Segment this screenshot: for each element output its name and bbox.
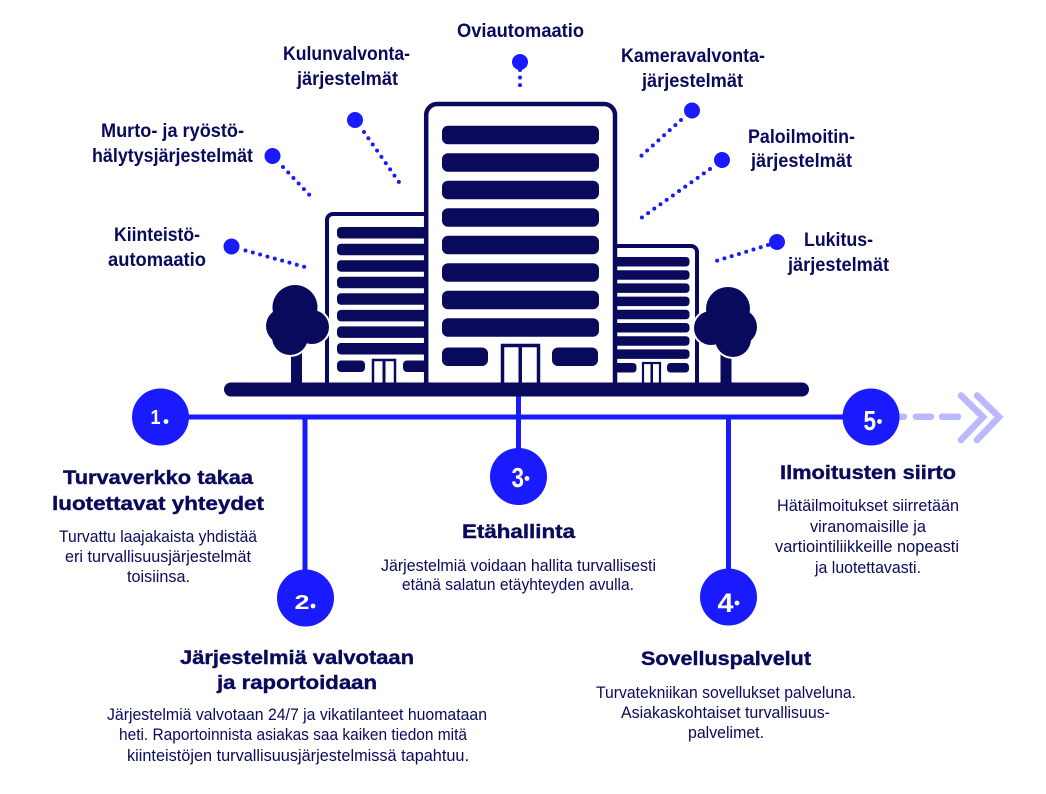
text: step 1: [59, 528, 258, 586]
label: Lukitusjärjestelmät: järjestelmät: [787, 255, 890, 276]
label: Kiinteistöautomaatio: [108, 225, 206, 271]
pointer: Kulunvalvontajärjestelmät: [347, 112, 400, 184]
text: step 5: Hätäilmoitukset siirretään: [777, 497, 959, 515]
illustration: main building: [426, 104, 615, 394]
illustration: left building: [327, 214, 437, 394]
illustration: right building: [600, 246, 697, 394]
label: Murto- ja ryöstöhälytysjärjestelmät: hälytysjärjestelmät: [92, 146, 254, 167]
text: step 5: ja luotettavasti.: [814, 559, 921, 577]
pointer: Paloilmoitinjärjestelmät: [640, 152, 730, 218]
text: step 1: toisiinsa.: [127, 568, 190, 586]
text: step 3: etänä salatun etäyhteyden avulla.: [402, 576, 634, 594]
heading: step 1: [52, 467, 265, 515]
heading: step 4: Sovelluspalvelut: [641, 648, 812, 670]
text: step 4: [596, 684, 856, 742]
text: step 2: heti. Raportoinnista asiakas saa kaiken tiedon mitä: [119, 726, 468, 744]
pointer: Lukitusjärjestelmät: [716, 234, 785, 261]
label: Murto- ja ryöstöhälytysjärjestelmät: Murto- ja ryöstö-: [101, 121, 244, 142]
timeline connectors: [160, 390, 871, 598]
label: Kiinteistöautomaatio: automaatio: [108, 250, 206, 271]
label: Lukitusjärjestelmät: [787, 230, 890, 276]
heading: step 3: Etähallinta: [462, 521, 575, 543]
label: Kameravalvontajärjestelmät: järjestelmät: [641, 71, 744, 92]
text: step 3: Järjestelmiä voidaan hallita turvallisesti: [381, 557, 656, 575]
label: Lukitusjärjestelmät: Lukitus-: [804, 230, 873, 251]
step marker 2: [277, 570, 334, 626]
step marker 4: [700, 568, 757, 626]
arrow: dashed continuation: [900, 396, 999, 440]
step marker 3: 3: [512, 462, 524, 493]
text: step 5: vartiointiliikkeille nopeasti: [775, 538, 959, 556]
label: Kiinteistöautomaatio: Kiinteistö-: [114, 225, 200, 246]
icon: right tree: [694, 287, 757, 384]
text: step 4: palvelimet.: [688, 724, 764, 742]
text: step 2: Järjestelmiä valvotaan 24/7 ja vikatilanteet huomataan: [107, 706, 487, 724]
label: Oviautomaatio: Oviautomaatio: [457, 21, 584, 42]
step marker 4: 4: [718, 588, 734, 618]
icon: left tree: [266, 285, 329, 384]
heading: step 1: Turvaverkko takaa: [63, 467, 253, 489]
heading: step 1: luotettavat yhteydet: [52, 493, 265, 515]
label: Kulunvalvontajärjestelmät: Kulunvalvonta-: [283, 44, 410, 65]
step marker 1: [132, 388, 189, 446]
text: step 5: viranomaisille ja: [810, 518, 927, 536]
step marker 3: [490, 448, 547, 505]
label: Kulunvalvontajärjestelmät: järjestelmät: [296, 69, 399, 90]
step marker 5: 5: [864, 405, 876, 436]
pointer: Oviautomaatio: [512, 54, 528, 86]
label: Kameravalvontajärjestelmät: [621, 46, 765, 92]
label: Kulunvalvontajärjestelmät: [283, 44, 410, 90]
pointer: Kameravalvontajärjestelmät: [640, 102, 700, 157]
heading: step 5: Ilmoitusten siirto: [780, 462, 956, 484]
text: step 3: [381, 557, 656, 594]
text: step 2: kiinteistöjen turvallisuusjärjestelmissä tapahtuu.: [127, 747, 469, 765]
heading: step 2: ja raportoidaan: [216, 672, 377, 694]
step marker 5: [842, 388, 900, 446]
pointer: Murto- ja ryöstöhälytysjärjestelmät: [264, 148, 310, 196]
heading: step 2: Järjestelmiä valvotaan: [180, 647, 414, 669]
label: Murto- ja ryöstöhälytysjärjestelmät: [92, 121, 254, 167]
step marker 2: 2: [294, 592, 310, 614]
label: Paloilmoitinjärjestelmät: Paloilmoitin-: [748, 127, 855, 148]
text: step 4: Asiakaskohtaiset turvallisuus-: [621, 704, 830, 722]
text: step 4: Turvatekniikan sovellukset palveluna.: [596, 684, 856, 702]
label: Paloilmoitinjärjestelmät: [748, 127, 855, 172]
text: step 1: Turvattu laajakaista yhdistää: [59, 528, 258, 546]
illustration: ground: [224, 382, 809, 396]
text: step 1: eri turvallisuusjärjestelmät: [65, 548, 251, 566]
pointer: Kiinteistöautomaatio: [224, 238, 305, 267]
label: Paloilmoitinjärjestelmät: järjestelmät: [750, 151, 853, 172]
text: step 2: [107, 706, 487, 765]
label: Kameravalvontajärjestelmät: Kameravalvonta-: [621, 46, 765, 67]
step marker 1: 1: [150, 407, 160, 429]
text: step 5: [775, 497, 959, 577]
heading: step 2: [180, 647, 414, 694]
